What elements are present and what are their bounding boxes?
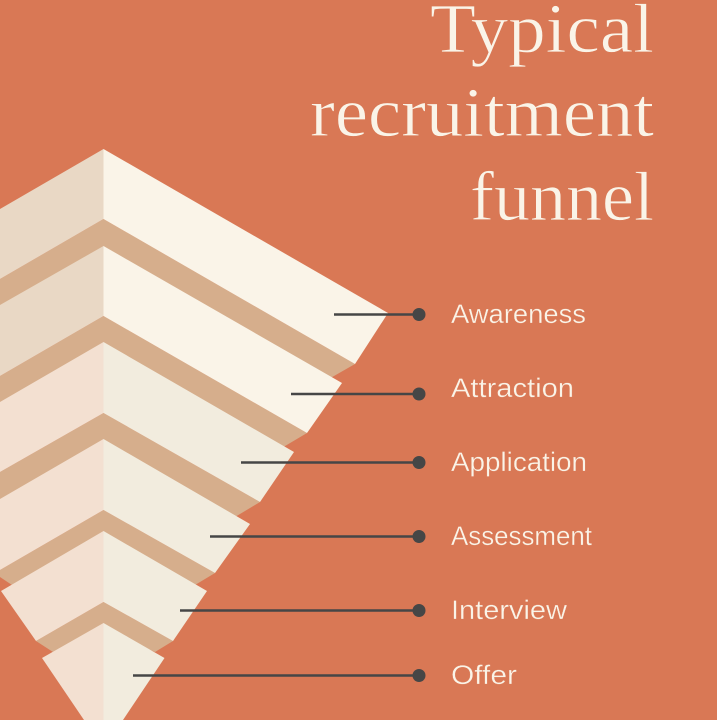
connector: assessment	[210, 530, 426, 543]
funnel layer: attraction	[0, 246, 342, 449]
title: funnel	[470, 159, 654, 236]
connector: awareness	[334, 308, 426, 321]
label: interview: Interview	[451, 595, 568, 625]
title: recruitment	[310, 75, 655, 152]
funnel layer: assessment	[0, 439, 250, 588]
label: attraction: Attraction	[451, 373, 574, 403]
connector: offer	[133, 669, 426, 682]
funnel layer: awareness	[0, 149, 388, 384]
funnel layer: interview	[1, 531, 207, 652]
connector: interview	[180, 604, 426, 617]
label: offer: Offer	[451, 660, 517, 690]
funnel layer: offer	[42, 623, 164, 720]
label: assessment: Assessment	[451, 521, 592, 551]
connector: attraction	[291, 388, 426, 400]
title	[310, 0, 655, 236]
funnel layer: application	[0, 342, 294, 517]
label: awareness: Awareness	[451, 299, 586, 329]
label: application: Application	[451, 447, 587, 477]
connector: application	[241, 456, 426, 469]
funnel chart	[0, 149, 388, 720]
